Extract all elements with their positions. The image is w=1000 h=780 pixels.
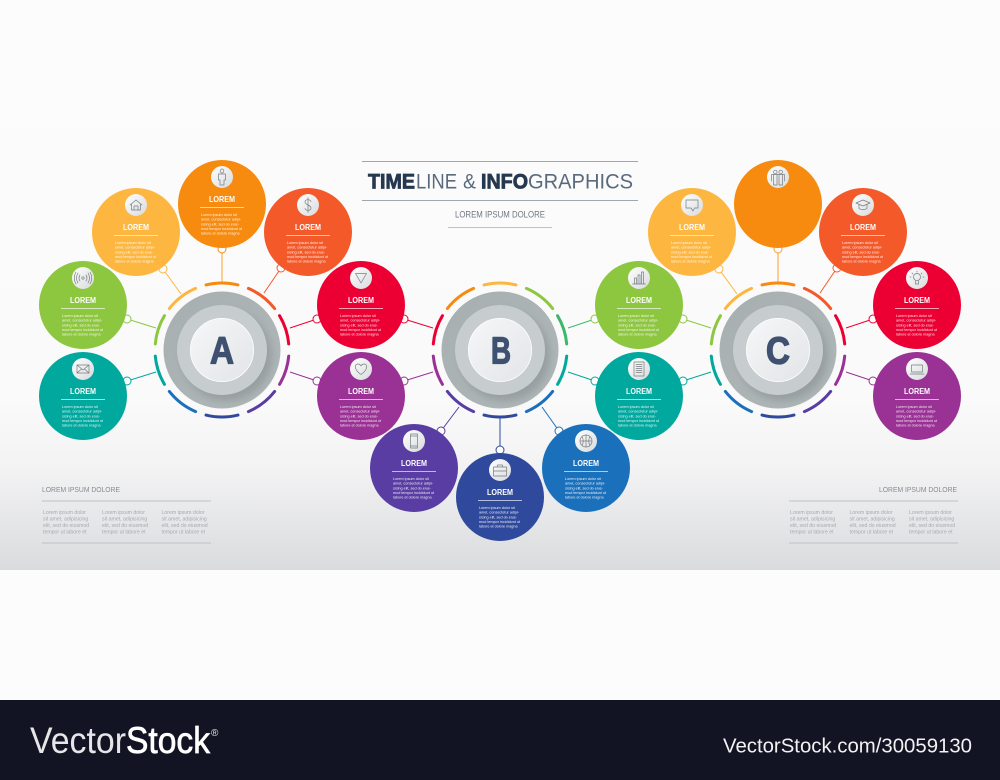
panel: C purple laptop: labore et dolore magna (896, 424, 935, 428)
panel: A orange-red dollar: Lorem ipsum dolor sit (287, 241, 324, 245)
panel: navy briefcase: amet, consectetur adipi- (479, 511, 520, 515)
hub C (711, 283, 845, 417)
panel: A green wifi: amet, consectetur adipi- (62, 319, 103, 323)
title (362, 162, 638, 200)
panel: blue basketball: Lorem ipsum dolor sit (565, 477, 602, 481)
text block: bottom left: sit amet, adipisicing (43, 516, 88, 522)
hub B (433, 283, 567, 417)
panel: A orange-red dollar: amet, consectetur adipi- (287, 246, 328, 250)
panel: violet phone: mod tempor incididunt ut (393, 491, 435, 495)
panel: green chart: sicing elit, sed do eius- (618, 323, 657, 327)
panel: C orange-red graduation cap: sicing elit, sed do eius- (842, 250, 881, 254)
panel: purple heart: sicing elit, sed do eius- (340, 414, 379, 418)
panel: purple heart: amet, consectetur adipi- (340, 410, 381, 414)
panel: teal document: mod tempor incididunt ut (618, 419, 660, 423)
panel: C red lightbulb: mod tempor incididunt ut (896, 328, 938, 332)
panel: A teal envelope: Lorem ipsum dolor sit (62, 405, 99, 409)
panel: A yellow home: amet, consectetur adipi- (115, 246, 156, 250)
panel: purple heart (317, 352, 405, 440)
panel: A teal envelope: mod tempor incididunt ut (62, 419, 104, 423)
panel: C yellow speech (648, 188, 736, 276)
footer url: VectorStock.com/30059130 (723, 736, 972, 758)
panel: C yellow speech: Lorem ipsum dolor sit (671, 241, 708, 245)
panel: purple heart: mod tempor incididunt ut (340, 419, 382, 423)
panel: red triangle: amet, consectetur adipi- (340, 319, 381, 323)
panel: A teal envelope: sicing elit, sed do eius- (62, 414, 101, 418)
panel: A orange person: Lorem ipsum dolor sit (201, 213, 238, 217)
text block: bottom left (42, 485, 211, 543)
panel: A orange person: amet, consectetur adipi- (201, 218, 242, 222)
connectors: hub B (400, 315, 599, 454)
panel: C yellow speech: amet, consectetur adipi- (671, 246, 712, 250)
panel: teal document: labore et dolore magna (618, 424, 657, 428)
panel: C orange-red graduation cap (819, 188, 907, 276)
panel: green chart: Lorem ipsum dolor sit (618, 314, 655, 318)
panel: C yellow speech: mod tempor incididunt ut (671, 255, 713, 259)
text block: bottom left: LOREM IPSUM DOLORE (42, 485, 120, 494)
panel: A green wifi: sicing elit, sed do eius- (62, 323, 101, 327)
panel: C purple laptop: LOREM (904, 387, 930, 396)
panel: teal document (595, 352, 683, 440)
panel: C orange-red graduation cap: amet, consectetur adipi- (842, 246, 883, 250)
hub letter C: C (766, 330, 790, 372)
text block: bottom right: Lorem ipsum dolor (909, 510, 952, 516)
panel: navy briefcase (456, 453, 544, 541)
text block: bottom right: elit, sed do eiusmod (909, 523, 955, 529)
panel: C red lightbulb (873, 261, 961, 349)
panel: C red lightbulb: sicing elit, sed do eius- (896, 323, 935, 327)
panel: A yellow home: labore et dolore magna (115, 260, 154, 264)
panel: C orange group icon, no text (734, 160, 822, 248)
panel: violet phone: sicing elit, sed do eius- (393, 486, 432, 490)
panel: C red lightbulb: LOREM (904, 296, 930, 305)
panel: A orange person: LOREM (209, 195, 235, 204)
panel: A yellow home: mod tempor incididunt ut (115, 255, 157, 259)
panel: red triangle: mod tempor incididunt ut (340, 328, 382, 332)
panel: A yellow home: LOREM (123, 223, 149, 232)
panel: navy briefcase: LOREM (487, 488, 513, 497)
panel: purple heart: Lorem ipsum dolor sit (340, 405, 377, 409)
panel: A yellow home (92, 188, 180, 276)
subtitle (448, 208, 552, 228)
panel: violet phone: labore et dolore magna (393, 496, 432, 500)
text block: bottom right: LOREM IPSUM DOLORE (879, 485, 957, 494)
panel: red triangle: sicing elit, sed do eius- (340, 323, 379, 327)
hub letter A: A (210, 330, 234, 372)
text block: bottom right (789, 485, 958, 543)
panel: C orange-red graduation cap: mod tempor incididunt ut (842, 255, 884, 259)
text block: bottom left: elit, sed do eiusmod (43, 523, 89, 529)
panel: violet phone (370, 424, 458, 512)
panel: A green wifi: LOREM (70, 296, 96, 305)
panel: C purple laptop: sicing elit, sed do eius- (896, 414, 935, 418)
panel: C orange-red graduation cap: Lorem ipsum dolor sit (842, 241, 879, 245)
panel: C red lightbulb: labore et dolore magna (896, 333, 935, 337)
text block: bottom left: tempor ut labore et (43, 529, 87, 535)
panel: A teal envelope: amet, consectetur adipi- (62, 410, 103, 414)
panel: green chart: LOREM (626, 296, 652, 305)
text block: bottom right: sit amet, adipisicing (850, 516, 895, 522)
panel: A orange person (178, 160, 266, 248)
panel: navy briefcase: labore et dolore magna (479, 525, 518, 529)
panel: navy briefcase: Lorem ipsum dolor sit (479, 506, 516, 510)
text block: bottom left: sit amet, adipisicing (102, 516, 147, 522)
panel: C red lightbulb: Lorem ipsum dolor sit (896, 314, 933, 318)
panel: A green wifi: Lorem ipsum dolor sit (62, 314, 99, 318)
panel: A teal envelope: labore et dolore magna (62, 424, 101, 428)
panel: violet phone: LOREM (401, 459, 427, 468)
text block: bottom right: elit, sed do eiusmod (790, 523, 836, 529)
panel: navy briefcase: mod tempor incididunt ut (479, 520, 521, 524)
background panel (0, 0, 1000, 570)
panel: teal document: amet, consectetur adipi- (618, 410, 659, 414)
panel: C red lightbulb: amet, consectetur adipi- (896, 319, 937, 323)
panel: blue basketball: LOREM (573, 459, 599, 468)
text block: bottom left: tempor ut labore et (102, 529, 146, 535)
text block: bottom left: elit, sed do eiusmod (162, 523, 208, 529)
text block: bottom right: elit, sed do eiusmod (850, 523, 896, 529)
panel: A teal envelope: LOREM (70, 387, 96, 396)
panel: green chart (595, 261, 683, 349)
footer logo: Stock (126, 720, 210, 761)
text block: bottom right: sit amet, adipisicing (790, 516, 835, 522)
text block: bottom left: Lorem ipsum dolor (162, 510, 205, 516)
panel: blue basketball (542, 424, 630, 512)
panel: purple heart: labore et dolore magna (340, 424, 379, 428)
text block: bottom left: sit amet, adipisicing (162, 516, 207, 522)
panel: blue basketball: mod tempor incididunt ut (565, 491, 607, 495)
panel: A orange-red dollar: sicing elit, sed do eius- (287, 250, 326, 254)
panel: A orange-red dollar: mod tempor incididunt ut (287, 255, 329, 259)
text block: bottom left: Lorem ipsum dolor (102, 510, 145, 516)
title: LINE (416, 170, 457, 194)
footer logo: Vector (30, 720, 126, 761)
panel: A green wifi: labore et dolore magna (62, 333, 101, 337)
hub letter B: B (491, 330, 511, 372)
text block: bottom right: sit amet, adipisicing (909, 516, 954, 522)
panel: A orange person: mod tempor incididunt ut (201, 227, 243, 231)
panel: navy briefcase: sicing elit, sed do eius- (479, 515, 518, 519)
panel: C yellow speech: LOREM (679, 223, 705, 232)
title: & (463, 170, 476, 194)
panel: C purple laptop: mod tempor incididunt ut (896, 419, 938, 423)
text block: bottom left: tempor ut labore et (162, 529, 206, 535)
panel: C purple laptop (873, 352, 961, 440)
panel: teal document: sicing elit, sed do eius- (618, 414, 657, 418)
panel: A orange-red dollar: LOREM (295, 223, 321, 232)
panel: C orange-red graduation cap: LOREM (850, 223, 876, 232)
subtitle: LOREM IPSUM DOLORE (455, 208, 545, 220)
panel: green chart: mod tempor incididunt ut (618, 328, 660, 332)
footer logo: ® (211, 728, 219, 739)
text block: bottom left: elit, sed do eiusmod (102, 523, 148, 529)
connectors: hub A (123, 245, 321, 385)
panel: teal document: LOREM (626, 387, 652, 396)
text block: bottom right: Lorem ipsum dolor (790, 510, 833, 516)
panel: violet phone: Lorem ipsum dolor sit (393, 477, 430, 481)
footer bar (0, 700, 1000, 780)
text block: bottom left: Lorem ipsum dolor (43, 510, 86, 516)
panel: C yellow speech: sicing elit, sed do eius- (671, 250, 710, 254)
panel: red triangle (317, 261, 405, 349)
panel: red triangle: Lorem ipsum dolor sit (340, 314, 377, 318)
panel: C purple laptop: Lorem ipsum dolor sit (896, 405, 933, 409)
panel: blue basketball: amet, consectetur adipi- (565, 482, 606, 486)
panel: C purple laptop: amet, consectetur adipi- (896, 410, 937, 414)
title: TIME (368, 170, 415, 194)
text block: bottom right: tempor ut labore et (850, 529, 894, 535)
panel: red triangle: LOREM (348, 296, 374, 305)
panel: A yellow home: sicing elit, sed do eius- (115, 250, 154, 254)
connectors: hub C (679, 245, 877, 385)
hub A (155, 283, 289, 417)
panel: purple heart: LOREM (348, 387, 374, 396)
panel: red triangle: labore et dolore magna (340, 333, 379, 337)
panel: teal document: Lorem ipsum dolor sit (618, 405, 655, 409)
title: INFO (481, 170, 528, 194)
panel: blue basketball: sicing elit, sed do eius- (565, 486, 604, 490)
panel: A orange-red dollar: labore et dolore magna (287, 260, 326, 264)
panel: A green wifi (39, 261, 127, 349)
panel: C orange-red graduation cap: labore et dolore magna (842, 260, 881, 264)
panel: A orange person: sicing elit, sed do eius- (201, 222, 240, 226)
text block: bottom right: Lorem ipsum dolor (850, 510, 893, 516)
text block: bottom right: tempor ut labore et (790, 529, 834, 535)
title: GRAPHICS (528, 170, 633, 194)
text block: bottom right: tempor ut labore et (909, 529, 953, 535)
panel: green chart: labore et dolore magna (618, 333, 657, 337)
panel: A orange-red dollar (264, 188, 352, 276)
panel: blue basketball: labore et dolore magna (565, 496, 604, 500)
panel: A teal envelope (39, 352, 127, 440)
panel: green chart: amet, consectetur adipi- (618, 319, 659, 323)
panel: A orange person: labore et dolore magna (201, 232, 240, 236)
panel: violet phone: amet, consectetur adipi- (393, 482, 434, 486)
footer logo (30, 720, 219, 761)
panel: A green wifi: mod tempor incididunt ut (62, 328, 104, 332)
panel: A yellow home: Lorem ipsum dolor sit (115, 241, 152, 245)
panel: C yellow speech: labore et dolore magna (671, 260, 710, 264)
